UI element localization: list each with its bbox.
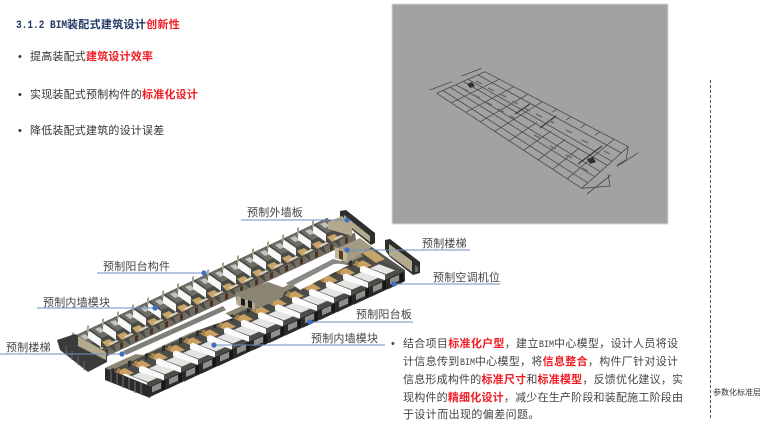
callout leader lines and dots [0,217,500,357]
label: air conditioner position: 预制空调机位 [433,272,500,284]
left end block of upper wing [57,334,107,372]
description line 2: 计信息传到 中心模型，将信息整合，构件厂针对设计 [403,356,678,368]
callout labels [6,206,500,354]
right end of lower wing [360,247,405,281]
label: stair right: 预制楼梯 [422,238,467,250]
bullet: standardized design: • [18,89,22,101]
side label: 参数化标准层 [713,388,760,397]
bullet: design efficiency: • [18,51,22,63]
title: 装配式建筑设计创新性 [67,19,180,31]
bullet: reduce errors: 降低装配式建筑的设计误差 [30,125,164,137]
panel: floor grid model render [392,4,668,224]
lower wing [105,253,405,397]
label: balcony component: 预制阳台构件 [103,261,170,273]
divider: dotted vertical line [710,80,711,418]
label: interior wall module left: 预制内墙模块 [43,297,110,309]
description line 2: BIM [460,358,474,369]
text block: description [391,338,683,421]
stair core block [335,238,372,262]
description line 3: 信息形成构件的标准尺寸和标准模型，反馈优化建议，实 [403,374,683,386]
upper wing [72,218,356,359]
courtyard gallery left [123,306,226,355]
description line 4: 现构件的精细化设计，减少在生产阶段和装配施工阶段由 [403,392,683,404]
title: 3.1.2 BIM [16,20,67,32]
central link block [235,282,285,310]
end wall piece lower [385,239,420,275]
label: interior wall module right: 预制内墙模块 [311,333,378,345]
description line 5: 于设计而出现的偏差问题。 [403,409,540,421]
label: exterior wall panel: 预制外墙板 [247,207,303,219]
end wall piece upper [328,210,375,245]
courtyard void left [135,312,233,355]
left end face of lower wing [105,368,150,398]
bullet: standardized design: 实现装配式预制构件的标准化设计 [30,89,198,101]
courtyard gallery right [286,259,349,287]
description line 1: BIM [539,340,554,351]
label: balcony slab: 预制阳台板 [356,309,412,321]
description line 1: 结合项目标准化户型，建立 中心模型，设计人员将设 [403,338,678,350]
bullet: reduce errors: • [18,125,22,137]
courtyard void right [292,263,349,290]
bullet: design efficiency: 提高装配式建筑设计效率 [30,51,153,63]
label: stair left: 预制楼梯 [6,342,51,354]
title [16,18,180,32]
bullet mark: • [391,338,395,350]
chart: isometric BIM building model [57,210,420,398]
